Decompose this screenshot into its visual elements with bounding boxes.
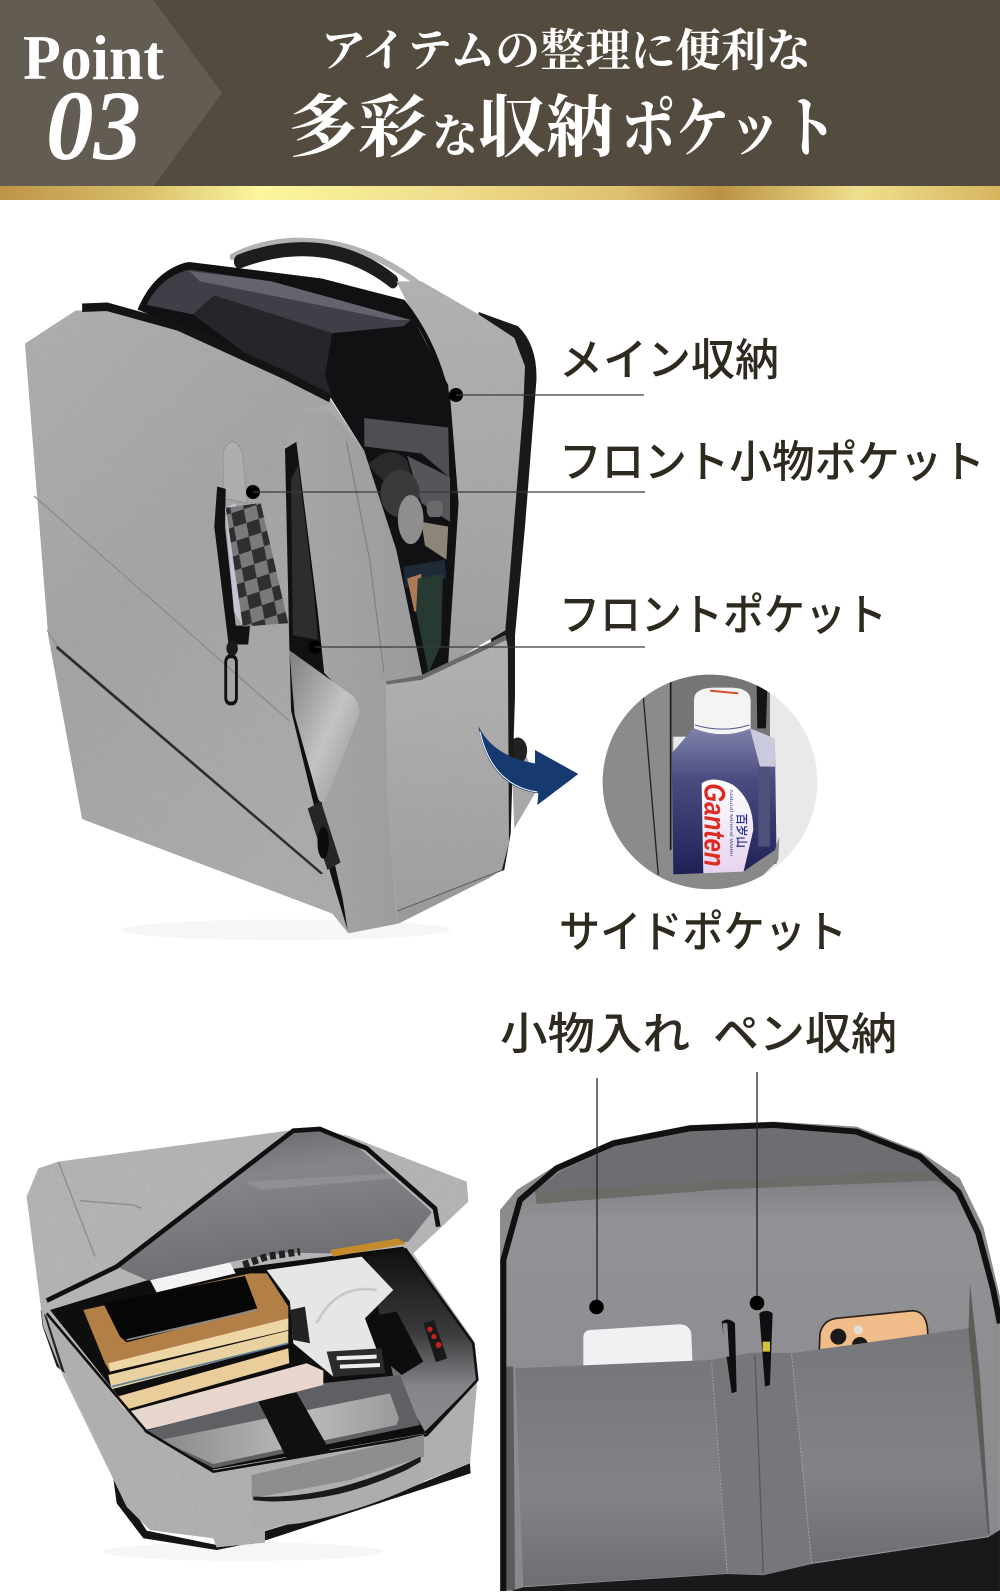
pen right xyxy=(759,1311,773,1387)
callout: main compartment xyxy=(449,336,779,402)
outer shell xyxy=(500,1122,1000,1593)
carry handle xyxy=(252,1435,424,1528)
label small print: Natural Mineral Water xyxy=(728,790,734,857)
zipper xyxy=(503,1125,1000,1592)
bottle label xyxy=(702,780,753,874)
brand text: Ganten xyxy=(697,783,730,867)
point badge xyxy=(0,0,222,187)
brand text cjk: 百岁山 xyxy=(734,813,749,848)
bag base silhouette xyxy=(27,1128,477,1547)
black strap xyxy=(757,685,767,728)
interior xyxy=(137,262,455,680)
pink book xyxy=(128,1363,323,1431)
keyring checker xyxy=(226,503,288,627)
label: フロントポケット xyxy=(559,591,887,640)
title line 2: 収納 xyxy=(478,90,614,166)
gold rule xyxy=(0,186,1000,200)
callout: pen holder xyxy=(713,1010,897,1310)
laptop xyxy=(160,1393,399,1464)
side mesh xyxy=(506,1366,515,1590)
tablet in front pocket xyxy=(289,650,359,803)
title line 2: な xyxy=(432,111,478,162)
base strip xyxy=(397,870,502,924)
power bank xyxy=(150,1263,236,1292)
upper band dark xyxy=(534,1140,929,1192)
stacked books xyxy=(421,522,448,560)
pocket left xyxy=(515,1360,727,1587)
strap behind bag xyxy=(511,734,539,828)
back panel xyxy=(396,281,525,668)
side strap left xyxy=(41,1310,65,1373)
right interior wall xyxy=(367,1252,477,1432)
zip pull xyxy=(226,656,236,703)
zippers xyxy=(47,1129,438,1301)
title line 2: 多彩 xyxy=(289,90,427,166)
zip slider lower xyxy=(314,805,334,866)
pocket fabric left xyxy=(602,681,674,883)
side pocket arrow xyxy=(478,726,578,805)
base black strip xyxy=(113,1463,471,1550)
book 3 xyxy=(115,1348,289,1410)
seam lower xyxy=(56,645,323,874)
top handle xyxy=(232,241,421,286)
interior xyxy=(50,1247,477,1470)
lid inner xyxy=(117,1129,435,1281)
label: フロント小物ポケット xyxy=(559,438,985,487)
lid outer xyxy=(27,1130,293,1377)
zipper around opening xyxy=(141,265,456,668)
headphones xyxy=(368,452,418,503)
bottle xyxy=(672,688,777,875)
black edge strip xyxy=(479,312,536,876)
pen left xyxy=(722,1320,737,1393)
callout: accessory pocket: 小物入れ xyxy=(500,1010,690,1059)
pocket lip xyxy=(657,837,779,893)
white card xyxy=(583,1324,693,1370)
cap xyxy=(694,688,751,734)
small zip pocket xyxy=(214,442,288,703)
phone xyxy=(819,1311,928,1353)
folded cloth xyxy=(267,1257,393,1377)
notebook xyxy=(407,574,421,612)
side pocket xyxy=(386,635,509,911)
lining xyxy=(146,270,411,333)
header banner xyxy=(0,0,1000,200)
lid right lip xyxy=(343,1134,468,1228)
bag base silhouette xyxy=(25,310,509,933)
label: side pocket: サイドポケット xyxy=(559,908,847,957)
callout: front pocket xyxy=(308,591,887,654)
front pocket slot xyxy=(285,442,357,932)
seam upper xyxy=(34,496,289,721)
main backpack photo illustration xyxy=(25,241,539,940)
ground shadow xyxy=(121,920,450,940)
title line 2: ポケット xyxy=(621,93,837,166)
top book xyxy=(83,1273,288,1372)
black strap xyxy=(257,1393,331,1458)
lining xyxy=(507,1128,992,1302)
zipper pulls xyxy=(243,1252,300,1265)
lid seams xyxy=(58,1162,142,1257)
side flap xyxy=(286,410,423,933)
bag body xyxy=(47,1317,477,1547)
lower left: open backpack xyxy=(27,1128,477,1561)
pocket stitching xyxy=(523,1355,988,1587)
title line 2 xyxy=(289,90,837,166)
umbrella xyxy=(360,1312,423,1375)
phone on book xyxy=(103,1276,257,1342)
callout: accessory pocket xyxy=(500,1010,690,1314)
badge word: Point: Point xyxy=(23,22,165,93)
lower right: inside panel xyxy=(500,1122,1000,1593)
callout: pen holder: ペン収納 xyxy=(713,1010,897,1059)
label: メイン収納 xyxy=(559,336,779,385)
mesh band xyxy=(535,1169,957,1204)
callout: front small pocket xyxy=(246,438,985,499)
pocket center xyxy=(710,1353,812,1575)
red label xyxy=(423,1320,447,1362)
book 2 xyxy=(108,1331,288,1389)
front panel xyxy=(25,310,348,928)
title line 1: アイテムの整理に便利な xyxy=(321,26,811,76)
front panel zip edge xyxy=(82,307,330,398)
side pocket inset circle xyxy=(600,670,817,893)
ground shadow xyxy=(103,1542,383,1561)
gold phone edge xyxy=(330,1238,406,1257)
bottom dark xyxy=(503,1530,1000,1593)
tablet sleeve xyxy=(143,1375,420,1468)
laptop inside xyxy=(364,418,449,477)
pocket right xyxy=(792,1328,988,1563)
badge number: 03: 03 xyxy=(46,70,141,181)
